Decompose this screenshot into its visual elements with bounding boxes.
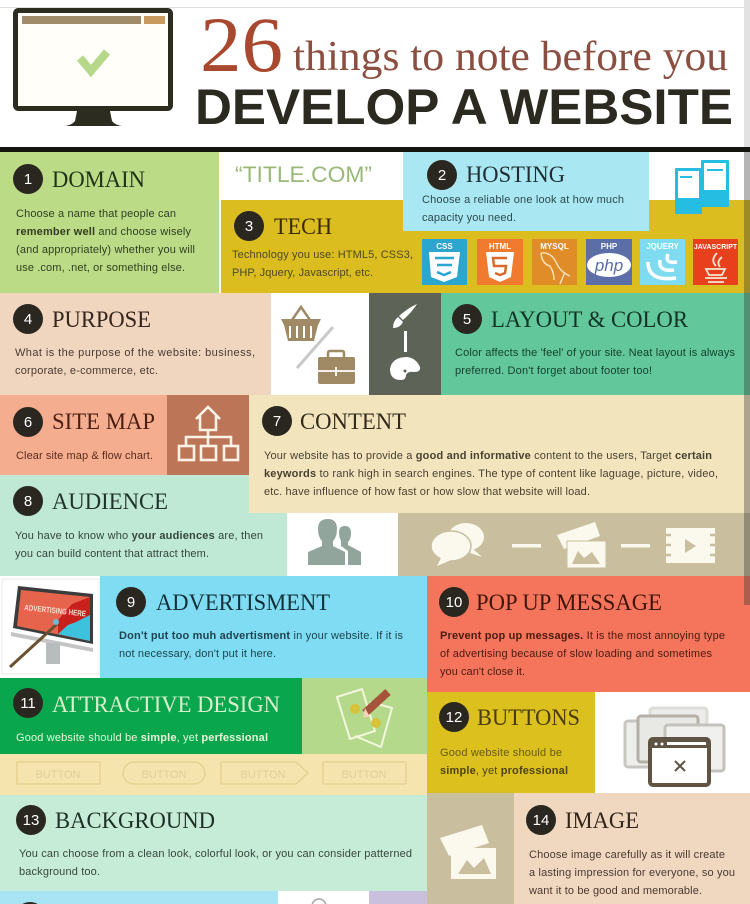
panel: 8 audience xyxy=(0,475,287,576)
title: things to note before you xyxy=(293,34,728,80)
panel: button samples xyxy=(0,754,427,795)
panel: 14 image xyxy=(514,793,750,904)
icon: palette xyxy=(390,357,420,380)
icon: basket xyxy=(281,307,321,341)
panel: 13 background: You can choose from a clean look, colorful look, or you can consider patterned xyxy=(19,848,412,860)
panel: 7 content: 7 xyxy=(273,413,281,430)
panel: 12 buttons: Good website should be xyxy=(440,747,562,759)
icon: servers xyxy=(675,160,729,214)
panel: 12 buttons xyxy=(427,692,595,793)
panel: 4 purpose: PURPOSE xyxy=(52,307,151,332)
panel: 2 hosting xyxy=(403,152,649,231)
button sample xyxy=(323,762,406,784)
panel: 5 layout and color: 5 xyxy=(463,311,471,328)
button sample xyxy=(221,762,308,784)
icon: browser windows xyxy=(595,692,750,793)
callout: title.com: “TITLE.COM” xyxy=(235,162,372,187)
panel: 4 purpose: What is the purpose of the website: business, xyxy=(15,347,255,359)
icon: image xyxy=(427,793,514,904)
panel: 5 layout and color xyxy=(441,293,750,395)
panel: 1 domain xyxy=(0,152,219,293)
icon: film xyxy=(666,528,715,563)
panel: 9 advertisment: ADVERTISMENT xyxy=(156,590,330,615)
panel: 14 image: a lasting impression for everyone, so you xyxy=(529,867,735,879)
panel: media icons xyxy=(398,513,750,576)
panel: 7 content: Your website has to provide a good and informative content to the users, Target certain xyxy=(264,450,712,462)
panel: 13 background: background too. xyxy=(19,866,100,878)
panel: layout icons xyxy=(369,293,441,395)
button sample: BUTTON xyxy=(341,769,387,781)
panel: 13 background: BACKGROUND xyxy=(55,808,215,833)
panel: 14 image: IMAGE xyxy=(565,808,639,833)
panel: 7 content: keywords to rank high in search engines. The type of content like laguage, picture, video, xyxy=(264,468,718,480)
icon: chat xyxy=(431,523,484,566)
icon: html5: HTML xyxy=(489,242,511,251)
panel: 1 domain: use .com, .net, or something else. xyxy=(16,262,185,274)
panel: purpose icons xyxy=(271,293,369,395)
panel: 10 pop up message: of advertising because of slow loading and sometimes xyxy=(440,648,712,660)
panel: 10 pop up message: 10 xyxy=(446,594,462,611)
button sample: BUTTON xyxy=(240,769,286,781)
icon: php: php xyxy=(594,256,623,275)
icon: photos xyxy=(557,522,606,568)
icon: mysql: MYSQL xyxy=(540,242,569,251)
button sample xyxy=(123,762,205,784)
panel: 1 domain: remember well and choose wisely xyxy=(16,226,192,238)
icon: jquery xyxy=(640,239,685,285)
panel: 10 pop up message: POP UP MESSAGE xyxy=(476,590,662,615)
icon: briefcase xyxy=(318,351,355,384)
panel: 5 layout and color: LAYOUT & COLOR xyxy=(491,307,689,332)
panel: 4 purpose: 4 xyxy=(24,311,32,328)
icon: javascript: JAVASCRIPT xyxy=(694,244,738,251)
panel: 4 purpose xyxy=(0,293,271,395)
panel: 12 buttons: 12 xyxy=(446,709,462,726)
button sample xyxy=(17,762,100,784)
panel: 9 advertisment: Don't put too muh advertisment in your website. If it is xyxy=(119,630,404,642)
button sample: BUTTON xyxy=(141,769,187,781)
panel: 9 advertisment xyxy=(100,576,427,678)
panel: 14 image: want it to be good and memorable. xyxy=(528,885,702,897)
panel: 1 domain: (and appropriately) whether you will xyxy=(16,244,195,256)
panel: 2 hosting: 2 xyxy=(438,167,446,184)
panel: 6 site map: 6 xyxy=(24,414,32,431)
panel: 8 audience: you can build content that attract them. xyxy=(15,548,209,560)
panel: 3 tech: PHP, Jquery, Javascript, etc. xyxy=(232,267,373,279)
panel: 4 purpose: corporate, e-commerce, etc. xyxy=(15,365,158,377)
icon: php xyxy=(586,239,632,285)
title xyxy=(195,1,733,135)
panel: 13 background: 13 xyxy=(23,812,39,829)
panel: 5 layout and color: Color affects the 'feel' of your site. Neat layout is always xyxy=(455,347,736,359)
panel: 12 buttons: simple, yet professional xyxy=(440,765,568,777)
panel: 11 attractive design: 11 xyxy=(20,695,36,712)
panel: 7 content: CONTENT xyxy=(300,409,406,434)
panel: 8 audience: 8 xyxy=(24,493,32,510)
panel: 5 layout and color: preferred. Don't forget about footer too! xyxy=(455,365,652,377)
panel: 2 hosting: Choose a reliable one look at how much xyxy=(422,194,624,206)
panel: 6 site map: SITE MAP xyxy=(52,409,155,434)
icon: html5 xyxy=(477,239,523,285)
panel: 2 hosting: HOSTING xyxy=(466,162,565,187)
panel: 10 pop up message: Prevent pop up messages. It is the most annoying type xyxy=(440,630,725,642)
panel: 12 buttons: BUTTONS xyxy=(477,705,580,730)
panel: 11 attractive design xyxy=(0,678,302,754)
panel: 11 attractive design: Good website should be simple, yet perfessional xyxy=(16,732,268,744)
panel: 8 audience: You have to know who your audiences are, then xyxy=(15,530,263,542)
icon: monitor with check xyxy=(16,10,170,126)
panel: 2 hosting: capacity you need. xyxy=(422,212,516,224)
panel: 15 cut off row xyxy=(0,891,427,904)
icon: design papers xyxy=(302,678,427,754)
panel: 14 image: Choose image carefully as it will create xyxy=(529,849,725,861)
panel: 10 pop up message: you can't close it. xyxy=(440,666,525,678)
icon: people xyxy=(287,513,398,576)
panel: 1 domain: 1 xyxy=(24,171,32,188)
panel: 3 tech: TECH xyxy=(274,214,332,239)
icon: javascript xyxy=(693,239,738,285)
panel: 9 advertisment: not necessary, don't put it here. xyxy=(119,648,276,660)
panel: 14 image: 14 xyxy=(533,812,549,829)
panel: 11 attractive design: ATTRACTIVE DESIGN xyxy=(52,692,280,717)
title: 26 xyxy=(200,1,283,88)
panel: 9 advertisment: 9 xyxy=(127,594,135,611)
panel: 3 tech: Technology you use: HTML5, CSS3, xyxy=(232,249,413,261)
panel: 3 tech: 3 xyxy=(245,218,253,235)
panel: 7 content: etc. have influence of how fast or how slow that website will load. xyxy=(264,486,590,498)
icon: brush xyxy=(393,304,417,328)
panel: 8 audience: AUDIENCE xyxy=(52,489,168,514)
icon: billboard: ADVERTISING HERE xyxy=(24,603,87,619)
panel: 6 site map: Clear site map & flow chart. xyxy=(16,450,153,462)
panel: 10 pop up message xyxy=(427,576,750,692)
panel: 1 domain: DOMAIN xyxy=(52,167,145,192)
panel: 1 domain: Choose a name that people can xyxy=(16,208,176,220)
icon: css xyxy=(422,239,467,285)
button sample: BUTTON xyxy=(35,769,81,781)
panel: 6 site map xyxy=(0,395,167,475)
panel: 13 background xyxy=(0,795,427,891)
panel: 7 content xyxy=(249,395,750,513)
icon: css: CSS xyxy=(436,242,453,251)
icon: mysql xyxy=(532,239,577,285)
title: DEVELOP A WEBSITE xyxy=(195,79,733,135)
icon: site map xyxy=(167,395,249,475)
icon: jquery: JQUERY xyxy=(646,242,679,251)
icon: billboard xyxy=(0,576,100,677)
icon: php: PHP xyxy=(601,242,618,251)
panel: 3 tech xyxy=(221,200,750,293)
